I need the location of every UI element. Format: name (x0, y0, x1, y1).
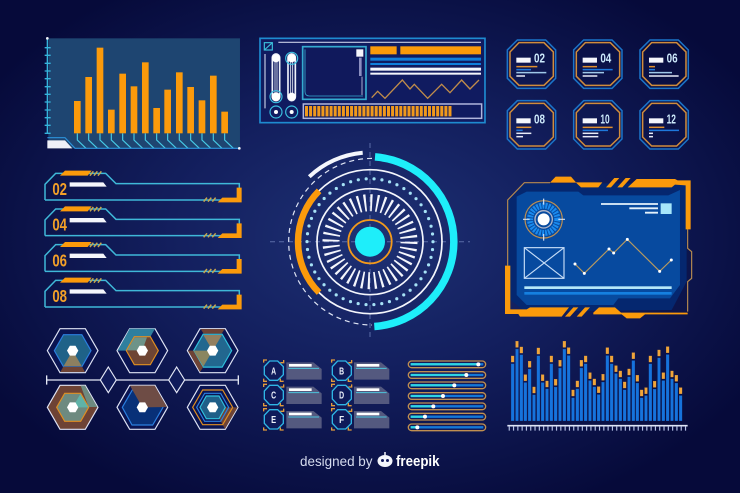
badge 04: 04 (600, 51, 612, 66)
hexagon 3 (187, 329, 238, 373)
hexagon 2 (117, 329, 168, 373)
dark outer plate (508, 183, 687, 312)
panel: lettered cards (264, 360, 389, 430)
crosshair (270, 143, 470, 340)
connector line with diamonds (47, 367, 238, 393)
central radial gauge (270, 143, 470, 340)
badge 02: 02 (534, 51, 545, 66)
capsule outlines (408, 361, 486, 431)
ruler (507, 426, 688, 428)
brand name: freepik (396, 453, 440, 470)
banner 02: 02 (52, 179, 67, 199)
orange caps (511, 341, 682, 396)
white tab (47, 140, 72, 148)
card A: A (271, 366, 276, 377)
freepik credit (300, 452, 440, 470)
axis end dots (46, 37, 241, 150)
cyan fills (411, 364, 478, 427)
orange inner ring (348, 220, 392, 263)
card C: C (271, 391, 276, 402)
spokes (331, 203, 409, 281)
badge 06: 06 (667, 51, 678, 66)
axis with ticks (45, 38, 51, 133)
base line (47, 138, 239, 148)
console frame (260, 38, 485, 123)
icon: freepik mascot (378, 452, 392, 467)
panel: slider list (408, 361, 486, 431)
round buttons (270, 106, 298, 118)
panel: hexagon diagrams (47, 329, 238, 429)
thin frame lines (508, 183, 692, 312)
banner 04 (45, 206, 242, 238)
badge 06 (640, 40, 688, 88)
bar connectors (77, 133, 233, 148)
slider two (286, 52, 298, 101)
knobs (415, 362, 480, 429)
footer bars (524, 286, 672, 295)
cyan core (355, 227, 385, 257)
badge 08: 08 (534, 111, 545, 126)
orange bars (74, 48, 228, 133)
credit text: designed by (300, 454, 373, 469)
banner 06 (45, 242, 242, 274)
badge 12: 12 (667, 111, 676, 126)
hexagon 5 (117, 385, 168, 429)
banner 08 (45, 278, 242, 309)
panel: numbered banners (45, 171, 242, 309)
banner 04: 04 (52, 215, 67, 235)
dotted ring (307, 179, 433, 305)
cyan arc (374, 157, 454, 326)
blue tracks (411, 364, 483, 427)
panel: control console (260, 38, 485, 123)
top and side lines (265, 42, 481, 108)
banner 08: 08 (52, 286, 67, 306)
slider one (270, 54, 282, 103)
panel: numbered badges (507, 40, 688, 149)
line chart (573, 238, 673, 275)
outer ring (298, 170, 442, 314)
blue columns (511, 349, 682, 421)
hexagon 1 (47, 329, 98, 373)
panel: orange bar chart (45, 37, 241, 150)
orange header bars (370, 46, 481, 54)
blue and white lines (370, 58, 481, 75)
badge 12 (640, 101, 688, 149)
progress bar (303, 104, 482, 118)
inner ring (317, 189, 423, 295)
card F: F (339, 415, 344, 426)
hexagon 6 (187, 385, 238, 429)
orange arc (298, 191, 319, 293)
chart background (48, 38, 240, 148)
white arc (309, 153, 363, 177)
panel: blue column chart (507, 341, 688, 428)
banner 06: 06 (52, 250, 67, 270)
card E: E (271, 415, 276, 426)
light square (661, 203, 672, 214)
blue inner plate (517, 190, 680, 305)
screen (303, 47, 366, 99)
header lines (601, 204, 658, 213)
line chart (372, 80, 479, 98)
dashed arc (289, 158, 372, 325)
badge 02 (507, 40, 556, 88)
reticle icon (523, 199, 565, 241)
badge 10: 10 (600, 111, 610, 126)
image placeholder (524, 248, 564, 278)
card B: B (339, 366, 344, 377)
panel: blue screen with orange frame (505, 177, 692, 318)
badge 10 (574, 101, 622, 149)
badge 04 (574, 40, 622, 88)
corner icon (264, 43, 272, 50)
banner 02 (45, 171, 242, 202)
hexagon 4 (47, 385, 98, 429)
orange frame pieces (505, 177, 691, 318)
card D: D (339, 391, 344, 402)
badge 08 (507, 101, 556, 149)
